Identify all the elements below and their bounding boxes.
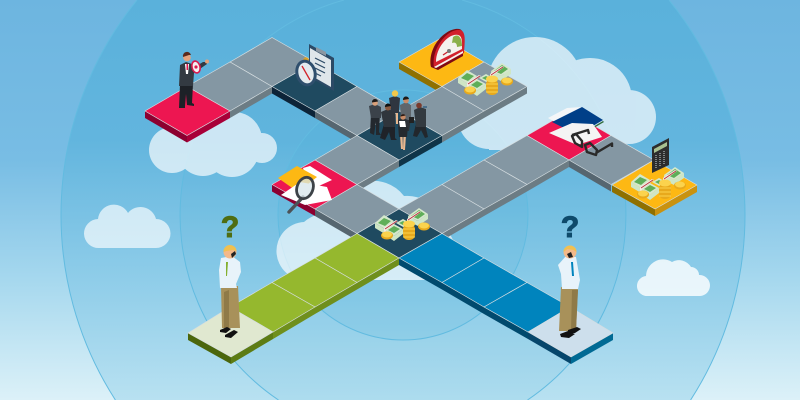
icon: money stack on gray tile — [458, 63, 513, 96]
tile: gray after speedometer — [399, 86, 484, 142]
icon: clipboard and stopwatch — [292, 44, 334, 91]
tile: dark junction — [357, 209, 442, 258]
icon: speedometer — [430, 29, 465, 70]
tile: pale blue start — [528, 307, 613, 364]
tile: dark team — [357, 111, 442, 167]
tile: gray before calculator — [569, 136, 654, 192]
icon: folders and glasses — [548, 107, 612, 155]
person: right man — [413, 103, 428, 138]
tile: green 1 — [230, 282, 315, 339]
person: front woman — [398, 114, 408, 150]
cloud: large right — [458, 37, 656, 155]
icon: money stack on orange tile — [631, 167, 686, 200]
tile: blue 1 — [484, 282, 570, 339]
figure: thinking man right — [558, 246, 581, 338]
tile: green 3 — [315, 234, 399, 290]
tile: blue 2 — [442, 258, 527, 314]
tile: gray right diagonal 3 — [484, 136, 569, 192]
icon: folder and magnifier — [278, 166, 332, 212]
tile: gray right diagonal 2 — [442, 160, 527, 216]
tile: green 2 — [272, 258, 357, 314]
icon: money stack on junction — [375, 208, 430, 241]
person: blonde woman — [389, 90, 400, 124]
tile: gray money — [442, 62, 527, 118]
tile: blue 3 — [399, 234, 484, 290]
cloud: under start tile — [149, 112, 277, 177]
tile: gray right diagonal 1 — [399, 184, 484, 240]
icon: calculator — [652, 138, 669, 173]
tile: gray second — [187, 62, 272, 118]
figure: thinking man left — [219, 245, 241, 338]
tile: red start — [145, 86, 230, 142]
cloud: centre — [276, 181, 454, 280]
cloud: small left — [84, 205, 170, 248]
tile: orange speedometer — [399, 38, 484, 94]
tile: pale green start — [188, 307, 273, 364]
cloud: small right — [637, 259, 710, 296]
tile: gray fifth — [315, 86, 399, 142]
person: gray suit — [400, 96, 414, 131]
tile: red folder right — [527, 111, 611, 160]
tile: orange calculator — [612, 160, 697, 216]
question mark: left: ? — [221, 211, 239, 244]
figure: business team — [369, 90, 428, 150]
tile: red magnifier — [272, 160, 357, 216]
tile: dark clock — [272, 62, 357, 118]
tile: gray below team — [315, 136, 399, 192]
person: centre man — [380, 103, 397, 140]
board path — [145, 38, 697, 364]
person: far left — [369, 99, 381, 135]
figure: man with megaphone — [179, 52, 209, 108]
tile: gray upper — [230, 38, 315, 86]
tile: gray above junction left — [315, 184, 399, 240]
question mark: right: ? — [561, 211, 579, 244]
